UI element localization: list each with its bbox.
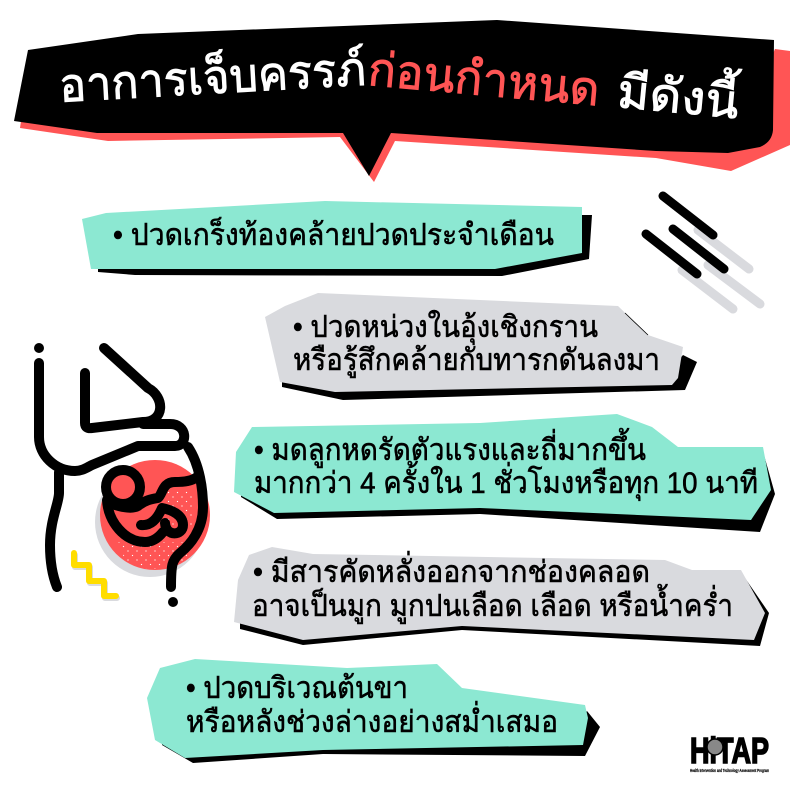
panel: symptom 2: หรือรู้สึกคล้ายกับทารกดันลงมา	[293, 344, 660, 378]
icon: motion stripes	[646, 196, 760, 309]
panel: symptom 5	[147, 659, 600, 763]
panel: symptom 5: หรือหลังช่วงล่างอย่างสม่ำเสมอ	[186, 701, 558, 739]
logo: HITAP: HiTAP	[690, 730, 769, 771]
symptom 2 text: • ปวดหน่วงในอุ้งเชิงกราน	[293, 310, 598, 346]
panel: symptom 3	[234, 414, 775, 532]
title part two: ก่อนกำหนด	[366, 42, 602, 116]
body dots	[34, 343, 44, 353]
title banner	[14, 20, 790, 182]
body outline	[39, 348, 203, 587]
panel: symptom 4: อาจเป็นมูก มูกปนเลือด เลือด หรือน้ำคร่ำ	[252, 584, 733, 624]
pain zigzag	[75, 555, 117, 598]
icon: pregnant body with fetus	[34, 343, 210, 607]
logo globe	[707, 739, 723, 755]
panel: symptom 1	[82, 201, 592, 276]
symptom 4 text: • มีสารคัดหลั่งออกจากช่องคลอด	[253, 551, 650, 589]
panel: symptom 2	[265, 293, 697, 400]
banner body	[14, 20, 774, 176]
title part one: อาการเจ็บครรภ์	[57, 40, 367, 112]
symptom 5 text: • ปวดบริเวณต้นขา	[186, 672, 408, 705]
fetus	[106, 470, 140, 504]
symptom 3 text: • มดลูกหดรัดตัวแรงและถี่มากขึ้น	[254, 428, 646, 468]
womb circle	[95, 467, 205, 577]
symptom 1 text: • ปวดเกร็งท้องคล้ายปวดประจำเดือน	[113, 216, 554, 252]
title part three: มีดังนี้	[615, 57, 742, 128]
panel: symptom 3: มากกว่า 4 ครั้งใน 1 ชั่วโมงหรือทุก 10 นาที	[254, 461, 758, 502]
panel: symptom 4	[234, 547, 769, 646]
banner shadow	[20, 49, 790, 182]
